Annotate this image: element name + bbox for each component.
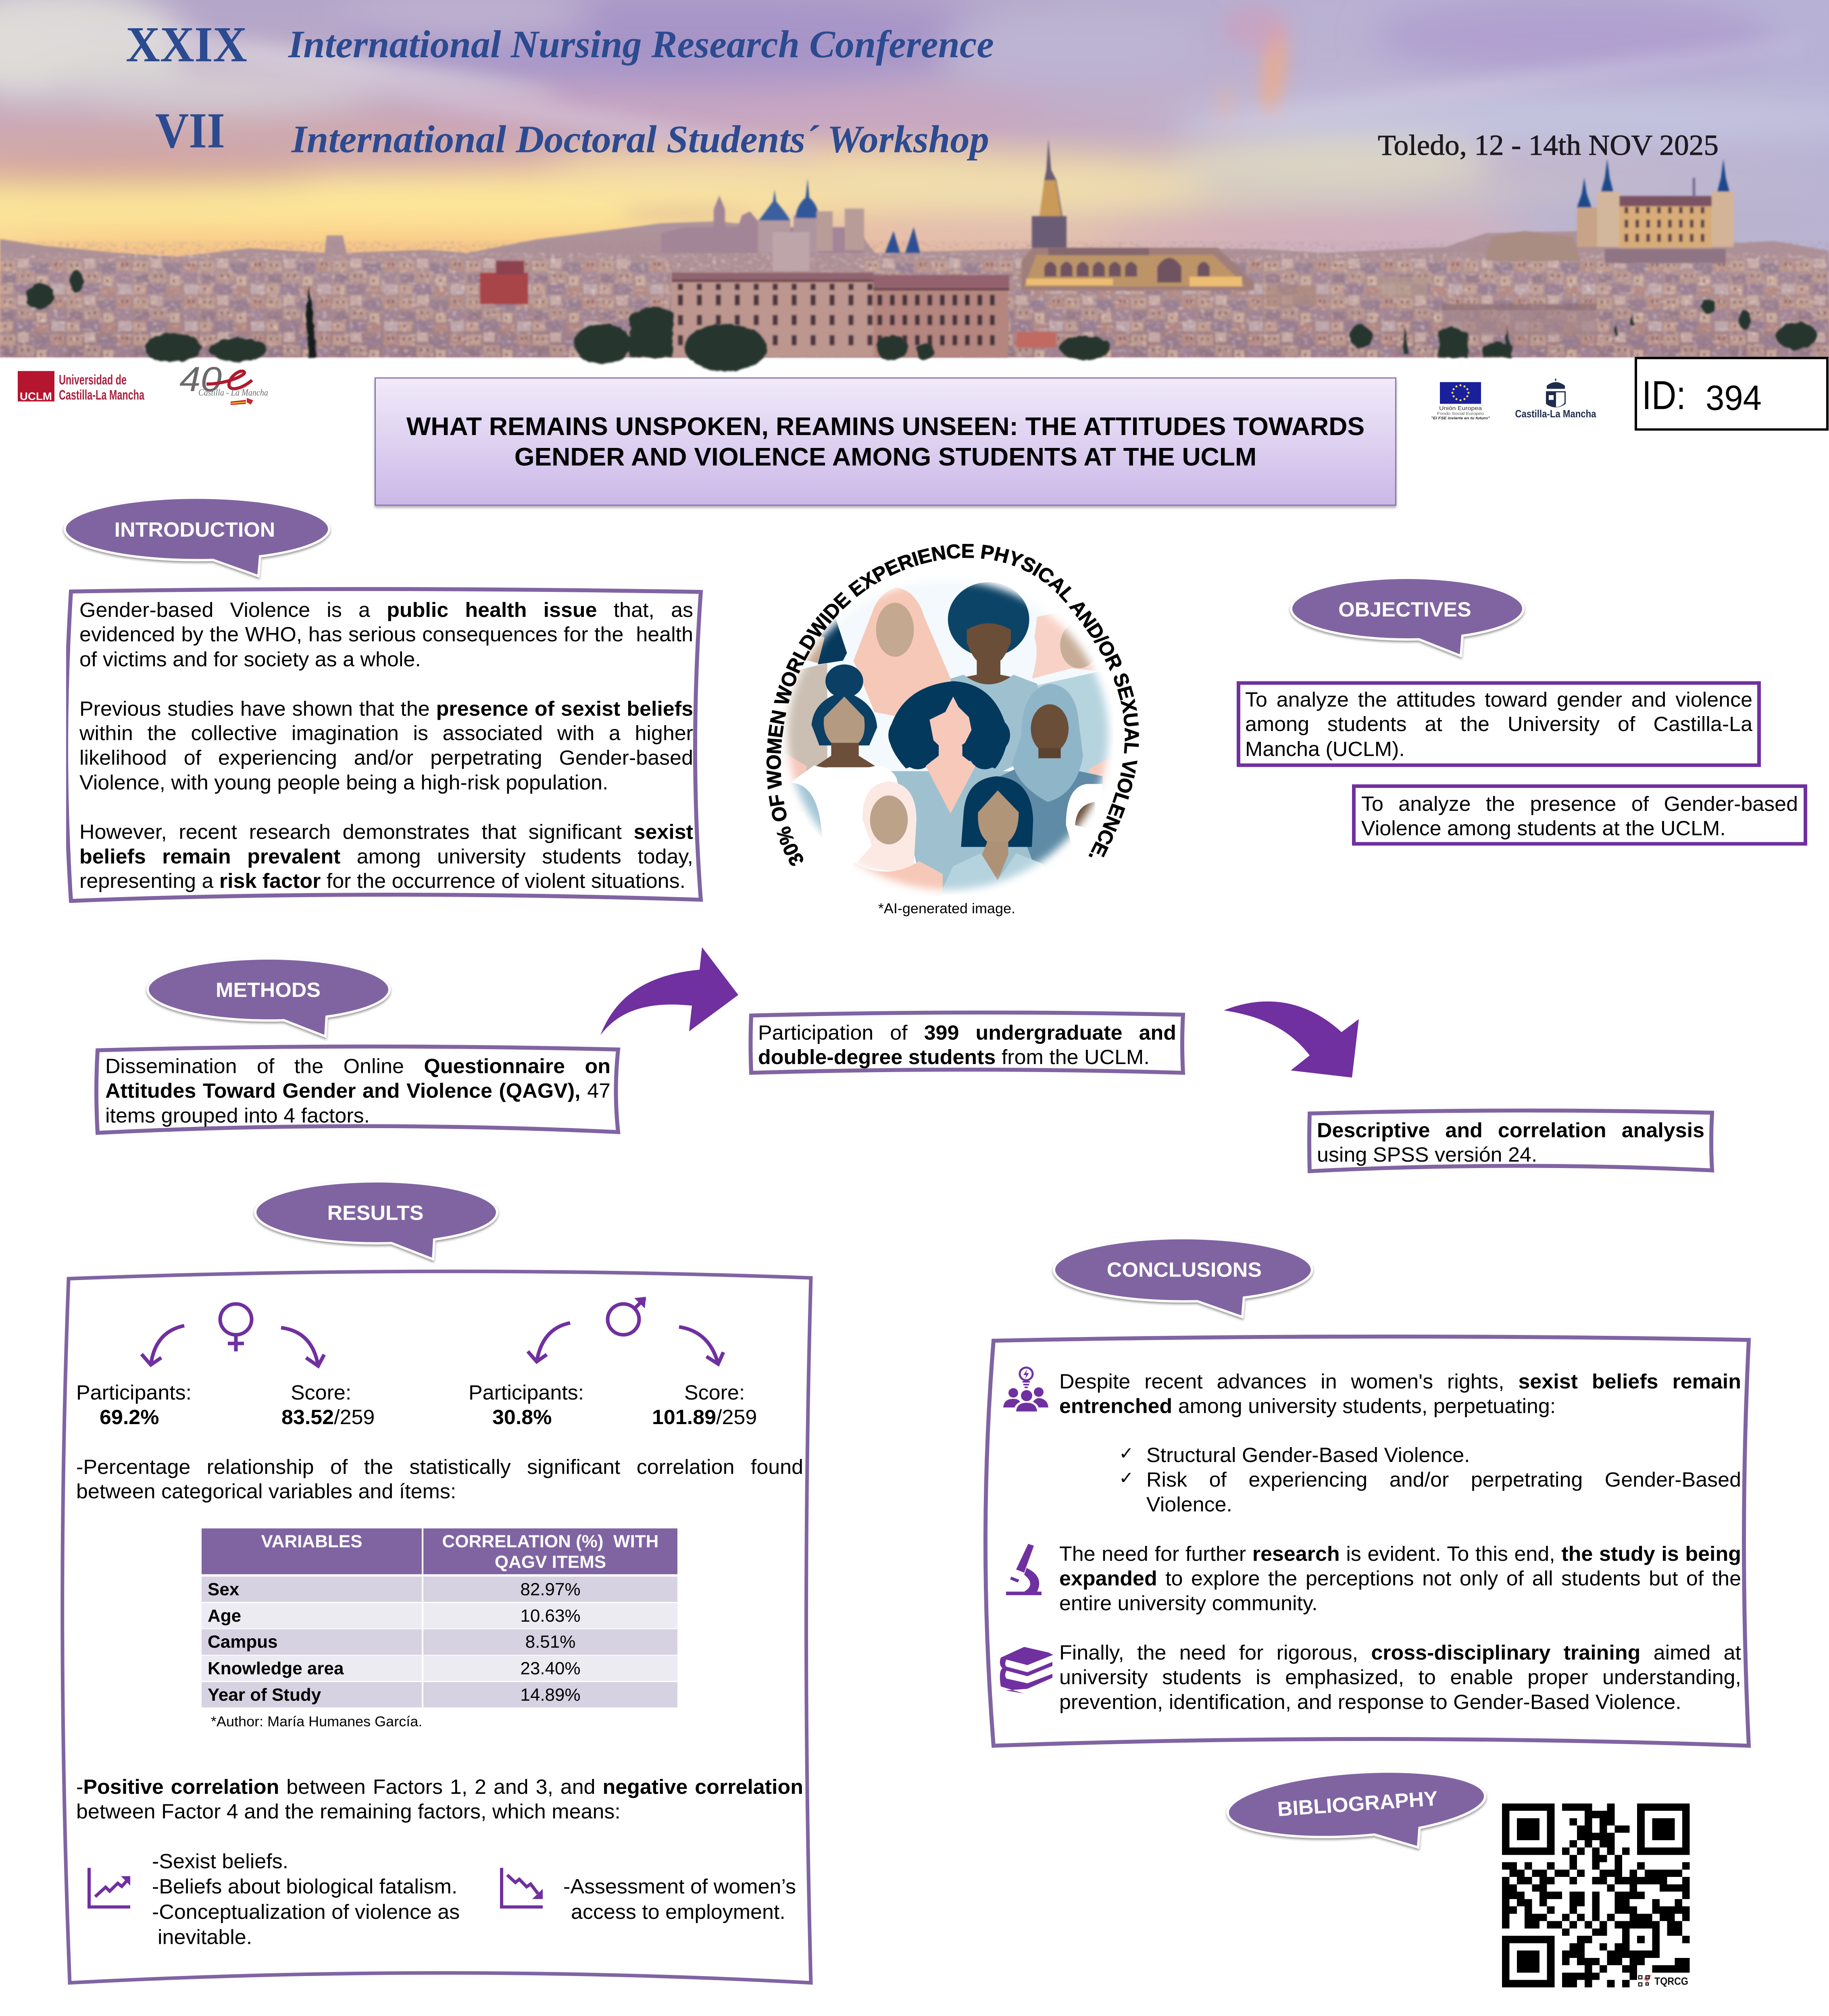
table intro text bbox=[76, 1455, 803, 1504]
panel: conclusions bbox=[981, 1332, 1753, 1750]
list: positive correlation: inevitable. bbox=[158, 1926, 252, 1949]
correlation table: Age bbox=[208, 1606, 241, 1626]
participation text bbox=[758, 1020, 1176, 1070]
QR generator mark: TQRCG bbox=[1654, 1975, 1688, 1987]
panel: introduction bbox=[66, 586, 705, 903]
curved statistic text: 30% OF WOMEN WORLDWIDE EXPERIENCE PHYSICAL AND/OR SEXUAL VIOLENCE. bbox=[762, 540, 1143, 870]
introduction text: Violence, with young people being a high-risk population. bbox=[79, 771, 608, 794]
check marks: ✓ bbox=[1119, 1443, 1134, 1464]
panel: objective one: Mancha (UCLM). bbox=[1245, 737, 1405, 760]
panel: participation bbox=[747, 1009, 1187, 1077]
panel: methods questionnaire bbox=[94, 1041, 623, 1137]
conclusion two text: entire university community. bbox=[1059, 1592, 1318, 1615]
stat: women participants: Participants: bbox=[76, 1381, 192, 1404]
list: positive correlation: -Beliefs about biological fatalism. bbox=[152, 1875, 457, 1898]
introduction text bbox=[79, 598, 693, 894]
banner photo: Toledo skyline at sunset bbox=[0, 0, 1829, 371]
conclusion list: Structural Gender-Based Violence. bbox=[1146, 1444, 1470, 1467]
panel: objective one: among students at the University of Castilla-La bbox=[1245, 713, 1752, 736]
correlation table: 82.97% bbox=[520, 1580, 581, 1599]
stat: women participants value: 69.2% bbox=[100, 1406, 159, 1429]
heading: conclusions bbox=[1054, 1238, 1312, 1317]
correlation text: -Positive correlation between Factors 1, 2 and 3, and negative correlation bbox=[76, 1776, 803, 1799]
heading: introduction: INTRODUCTION bbox=[115, 519, 275, 541]
introduction text: of victims and for society as a whole. bbox=[79, 648, 421, 671]
logo: 40e Castilla-La Mancha: 40 bbox=[179, 360, 222, 399]
correlation table: 8.51% bbox=[525, 1632, 575, 1652]
list: negative correlation: access to employment. bbox=[571, 1901, 785, 1924]
correlation table: 10.63% bbox=[520, 1606, 581, 1626]
circular illustration: women and statistic bbox=[762, 540, 1143, 916]
logo: UCLM: Castilla-La Mancha bbox=[59, 387, 144, 403]
correlation table: Knowledge area bbox=[208, 1659, 344, 1678]
project title box: WHAT REMAINS UNSPOKEN, REAMINS UNSEEN: THE ATTITUDES TOWARDS bbox=[406, 412, 1364, 441]
conclusion list: Risk of experiencing and/or perpetrating Gender-Based bbox=[1146, 1468, 1741, 1491]
introduction text: evidenced by the WHO, has serious consequences for the health bbox=[79, 623, 693, 646]
methods questionnaire text: items grouped into 4 factors. bbox=[105, 1104, 370, 1127]
title: VII: VII bbox=[155, 102, 225, 158]
logo: Castilla-La Mancha bbox=[1515, 379, 1596, 420]
heading: results: RESULTS bbox=[327, 1202, 423, 1225]
panel: objective two: To analyze the presence of Gender-based bbox=[1361, 793, 1798, 816]
panel: statistical analysis bbox=[1306, 1108, 1716, 1175]
illustration: diverse group of women bbox=[772, 568, 1124, 902]
heading: bibliography: BIBLIOGRAPHY bbox=[1277, 1787, 1439, 1821]
correlation table bbox=[202, 1529, 677, 1708]
panel: objective two bbox=[1352, 784, 1807, 846]
logo: European Union: "El FSE invierte en tu futuro" bbox=[1431, 416, 1490, 420]
heading: objectives bbox=[1291, 578, 1523, 656]
QR code for bibliography bbox=[1502, 1804, 1689, 1987]
statistical analysis text bbox=[1317, 1118, 1704, 1168]
conclusion three text bbox=[1059, 1641, 1741, 1714]
list: negative correlation bbox=[563, 1874, 796, 1925]
Alcazar fortress bbox=[1486, 159, 1734, 263]
conclusion one text bbox=[1059, 1370, 1741, 1419]
introduction text: beliefs remain prevalent among university students today, bbox=[79, 845, 693, 868]
correlation table: QAGV ITEMS bbox=[495, 1552, 606, 1572]
stat: women score value: 83.52/259 bbox=[281, 1406, 375, 1429]
methods questionnaire text bbox=[105, 1054, 610, 1128]
table intro text: between categorical variables and ítems: bbox=[76, 1481, 456, 1503]
conclusion two text: expanded to explore the perceptions not only of all students but of the bbox=[1059, 1567, 1741, 1590]
heading: results bbox=[255, 1181, 497, 1259]
heading: conclusions: CONCLUSIONS bbox=[1107, 1258, 1262, 1281]
introduction text: likelihood of experiencing and/or perpetrating Gender-based bbox=[79, 747, 693, 769]
methods questionnaire text: Dissemination of the Online Questionnaire on bbox=[105, 1055, 610, 1078]
conclusion one text: Despite recent advances in women's rights, sexist beliefs remain bbox=[1059, 1370, 1741, 1393]
ID box: ID: bbox=[1642, 373, 1686, 418]
heading: bibliography bbox=[1225, 1764, 1489, 1860]
check marks: ✓ bbox=[1119, 1468, 1134, 1488]
big ochre building with windows bbox=[672, 272, 1009, 357]
logo: UCLM: Universidad de bbox=[59, 372, 127, 387]
check marks bbox=[1119, 1441, 1134, 1491]
heading: methods: METHODS bbox=[216, 979, 321, 1002]
correlation table: VARIABLES bbox=[261, 1532, 362, 1552]
methods questionnaire text: Attitudes Toward Gender and Violence (QAGV), 47 bbox=[105, 1080, 610, 1103]
stat: men score: Score: bbox=[684, 1381, 745, 1404]
date and place: Toledo, 12 - 14th NOV 2025 bbox=[1378, 129, 1719, 162]
dark trees bbox=[26, 271, 1817, 371]
logo: UCLM: UCLM bbox=[20, 390, 52, 402]
cathedral tower and glowing nave bbox=[1021, 139, 1254, 290]
arrow: participation to analysis bbox=[1224, 1002, 1359, 1077]
ID box: 394 bbox=[1706, 378, 1762, 417]
conclusion three text: Finally, the need for rigorous, cross-disciplinary training aimed at bbox=[1059, 1641, 1741, 1664]
project title box bbox=[375, 377, 1396, 506]
title: workshop name: International Doctoral Students´ Workshop bbox=[291, 118, 989, 161]
conclusion three text: university students is emphasized, to enable proper understanding, bbox=[1059, 1666, 1741, 1689]
panel: results bbox=[60, 1268, 815, 1986]
panel: objective one bbox=[1237, 681, 1761, 767]
statistical analysis text: using SPSS versión 24. bbox=[1317, 1144, 1537, 1166]
correlation table: Campus bbox=[208, 1632, 278, 1652]
logo: Castilla-La Mancha: Castilla-La Mancha bbox=[1515, 408, 1596, 420]
logo: UCLM bbox=[18, 371, 144, 403]
stat: men score value: 101.89/259 bbox=[652, 1406, 757, 1429]
stat: men participants value: 30.8% bbox=[492, 1406, 552, 1429]
logo: 40e Castilla-La Mancha bbox=[179, 360, 268, 405]
introduction text: Previous studies have shown that the presence of sexist beliefs bbox=[79, 697, 693, 720]
panel: objective one: To analyze the attitudes toward gender and violence bbox=[1245, 688, 1752, 711]
title: XXIX: XXIX bbox=[126, 16, 247, 72]
introduction text: Gender-based Violence is a public health issue that, as bbox=[79, 599, 693, 622]
table caption: *Author: María Humanes García. bbox=[211, 1713, 422, 1729]
list: positive correlation bbox=[152, 1849, 460, 1950]
list: negative correlation: -Assessment of women’s bbox=[563, 1875, 796, 1898]
correlation table: 23.40% bbox=[520, 1659, 581, 1678]
sky bbox=[0, 0, 1829, 357]
QR generator mark bbox=[1639, 1975, 1688, 1987]
arrow: methods to participation bbox=[600, 947, 738, 1035]
heading: methods bbox=[148, 958, 390, 1037]
table intro text: -Percentage relationship of the statistically significant correlation found bbox=[76, 1456, 803, 1479]
logo: European Union: Fondo Social Europeo bbox=[1437, 412, 1484, 416]
conclusion list: Violence. bbox=[1146, 1493, 1232, 1516]
statistical analysis text: Descriptive and correlation analysis bbox=[1317, 1119, 1704, 1142]
logo: European Union: Unión Europea bbox=[1439, 405, 1482, 411]
conclusion two text bbox=[1059, 1542, 1741, 1616]
stat: men participants: Participants: bbox=[469, 1381, 584, 1404]
image caption: *AI-generated image. bbox=[878, 900, 1015, 916]
correlation table: CORRELATION (%) WITH bbox=[442, 1532, 658, 1552]
list: positive correlation: -Conceptualization of violence as bbox=[152, 1901, 460, 1924]
logo: 40e Castilla-La Mancha: Castilla - La Mancha bbox=[198, 387, 268, 398]
correlation text bbox=[76, 1775, 803, 1824]
logo: European Union bbox=[1431, 382, 1490, 420]
introduction text: representing a risk factor for the occurrence of violent situations. bbox=[79, 870, 685, 893]
title: conference name: International Nursing Research Conference bbox=[288, 23, 994, 66]
conclusion three text: prevention, identification, and response to Gender-Based Violence. bbox=[1059, 1691, 1681, 1714]
left hilltop palace with blue domes bbox=[661, 179, 920, 271]
conclusion list bbox=[1146, 1443, 1741, 1517]
participation text: double-degree students from the UCLM. bbox=[758, 1046, 1150, 1069]
correlation text: between Factor 4 and the remaining factors, which means: bbox=[76, 1800, 621, 1823]
participation text: Participation of 399 undergraduate and bbox=[758, 1021, 1176, 1044]
correlation table: Year of Study bbox=[208, 1685, 321, 1705]
conclusion one text: entrenched among university students, perpetuating: bbox=[1059, 1395, 1556, 1418]
correlation table: 14.89% bbox=[520, 1685, 581, 1705]
introduction text: within the collective imagination is associated with a higher bbox=[79, 722, 693, 745]
introduction text: However, recent research demonstrates that significant sexist bbox=[79, 821, 693, 843]
city buildings bbox=[0, 221, 1829, 357]
list: positive correlation: -Sexist beliefs. bbox=[152, 1850, 288, 1873]
conclusion two text: The need for further research is evident. To this end, the study is being bbox=[1059, 1543, 1741, 1566]
project title box: GENDER AND VIOLENCE AMONG STUDENTS AT THE UCLM bbox=[515, 442, 1256, 471]
stat: women score: Score: bbox=[291, 1381, 351, 1404]
heading: introduction bbox=[65, 498, 329, 576]
correlation table: Sex bbox=[208, 1580, 239, 1599]
ID box bbox=[1636, 358, 1827, 429]
heading: objectives: OBJECTIVES bbox=[1338, 598, 1471, 621]
panel: objective two: Violence among students at the UCLM. bbox=[1361, 817, 1726, 840]
